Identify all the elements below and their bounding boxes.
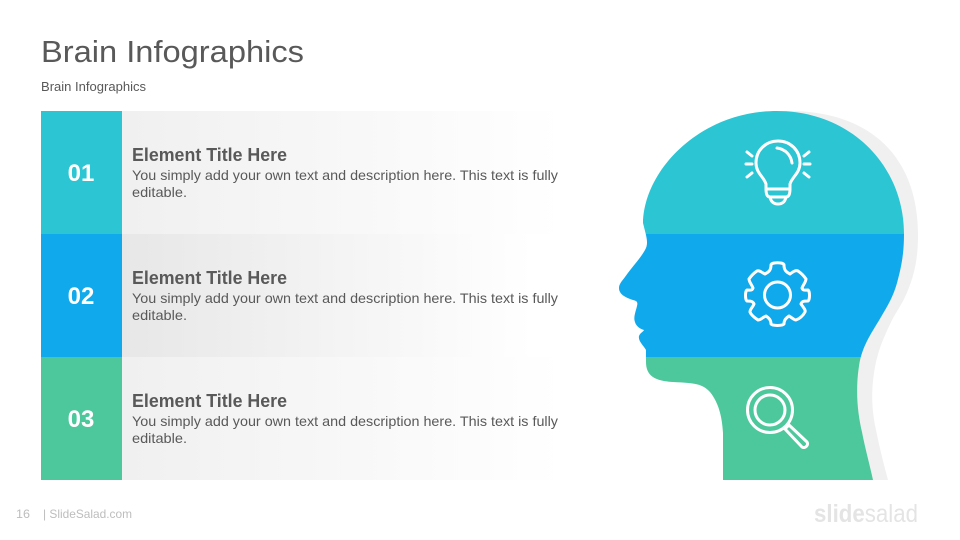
icon: light bulb: [746, 141, 810, 204]
row 02 description: [132, 290, 558, 323]
panel: row 03: [41, 357, 562, 480]
head silhouette shadow: [780, 111, 918, 480]
row 03 description: You simply add your own text and description here. This text is fully: [132, 413, 558, 429]
row 03 heading: Element Title Here: [132, 391, 287, 411]
row 02 number block: [41, 234, 122, 357]
row 03 background: [122, 357, 562, 480]
row 01 number block: [41, 111, 122, 234]
row 03 description: [132, 413, 558, 446]
row 01 background: [122, 111, 562, 234]
title: Brain Infographics: [41, 34, 304, 69]
head section: bottom: [646, 357, 873, 480]
row 03 number block: [41, 357, 122, 480]
panel: row 01: [41, 111, 562, 234]
icon: magnifying glass: [748, 388, 808, 448]
row 02 description: You simply add your own text and description here. This text is fully: [132, 290, 558, 306]
row 01 number block: 01: [68, 160, 94, 187]
row 01 description: [132, 167, 558, 200]
row 01 heading: Element Title Here: [132, 145, 287, 165]
subtitle: Brain Infographics: [41, 80, 146, 94]
logo wordmark: slidesalad: [814, 500, 918, 528]
head section: top: [643, 111, 904, 234]
row 02 heading: Element Title Here: [132, 268, 287, 288]
page number: 16: [16, 507, 30, 521]
head section: middle: [610, 234, 910, 357]
row 02 description: editable.: [132, 307, 187, 323]
row 02 number block: 02: [68, 283, 94, 310]
row 03 description: editable.: [132, 430, 187, 446]
head silhouette: [610, 105, 910, 480]
panel: row 02: [41, 234, 558, 357]
row 01 description: You simply add your own text and description here. This text is fully: [132, 167, 558, 183]
icon: gear: [746, 263, 810, 326]
row 01 description: editable.: [132, 184, 187, 200]
row 03 number block: 03: [68, 406, 94, 433]
footer site name: | SlideSalad.com: [43, 507, 132, 521]
row 02 background: [122, 234, 532, 357]
